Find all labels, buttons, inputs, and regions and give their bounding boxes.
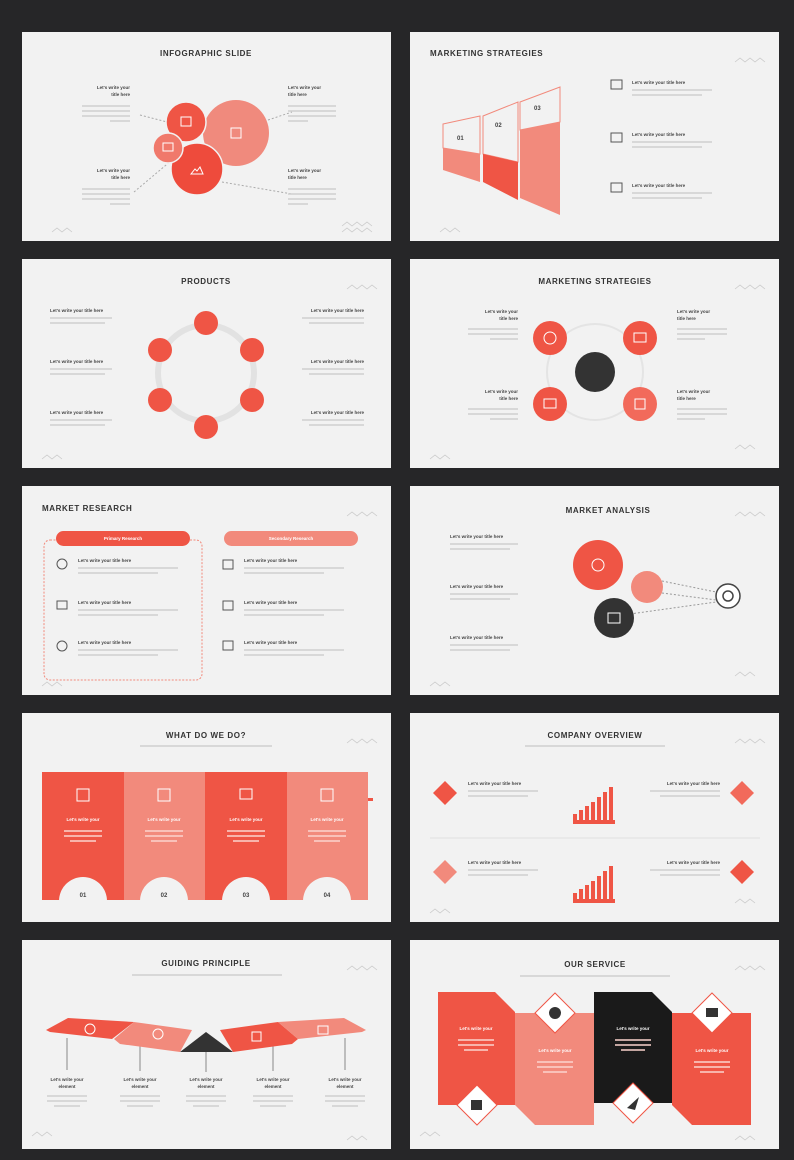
four step columns: 01: [80, 893, 87, 899]
secondary research panel: [223, 531, 358, 655]
list items: Let's write your title here: [632, 183, 686, 188]
text blocks: [450, 534, 518, 650]
text blocks: Let's write your: [97, 85, 130, 90]
slide 5: market research: [22, 486, 391, 695]
secondary research panel: Let's write your title here: [244, 640, 298, 645]
service columns: Let's write your: [616, 1026, 650, 1031]
four step columns: 04: [324, 893, 331, 899]
text blocks: Let's write your: [485, 309, 518, 314]
five text blocks: Let's write your: [50, 1077, 84, 1082]
title: MARKETING STRATEGIES: [538, 277, 652, 286]
five text blocks: element: [58, 1084, 76, 1089]
five text blocks: element: [264, 1084, 282, 1089]
folded ribbon: [46, 1018, 366, 1072]
text blocks: [468, 781, 720, 875]
text blocks: Let's write your title here: [667, 860, 720, 865]
five text blocks: Let's write your: [123, 1077, 157, 1082]
five text blocks: Let's write your: [256, 1077, 290, 1082]
text blocks: Let's write your: [288, 85, 321, 90]
slide 3: products: [22, 259, 391, 468]
title: GUIDING PRINCIPLE: [161, 959, 251, 968]
bubble funnel: [573, 540, 740, 638]
text blocks: Let's write your: [485, 389, 518, 394]
perspective bars: 02: [495, 123, 502, 129]
title: WHAT DO WE DO?: [166, 731, 246, 740]
text columns: Let's write your title here: [311, 308, 364, 313]
text blocks: Let's write your title here: [468, 781, 522, 786]
list items: Let's write your title here: [632, 80, 686, 85]
title: MARKET RESEARCH: [42, 504, 132, 513]
hub diagram: [533, 321, 657, 421]
secondary research panel: Let's write your title here: [244, 558, 298, 563]
text blocks: title here: [499, 316, 518, 321]
four step columns: Let's write your: [66, 817, 100, 822]
five text blocks: Let's write your: [189, 1077, 223, 1082]
service columns: Let's write your: [538, 1048, 572, 1053]
text columns: [50, 308, 364, 425]
title: INFOGRAPHIC SLIDE: [160, 49, 252, 58]
five text blocks: element: [197, 1084, 215, 1089]
perspective bars: [443, 87, 560, 215]
title: MARKET ANALYSIS: [566, 506, 650, 515]
secondary research panel: Secondary Research: [269, 536, 314, 541]
slide 1: infographic slide: [22, 32, 391, 241]
four step columns: Let's write your: [147, 817, 181, 822]
text blocks: title here: [677, 316, 696, 321]
text blocks: title here: [288, 175, 307, 180]
slide 9: guiding principle: [22, 940, 391, 1149]
text blocks: Let's write your title here: [450, 635, 504, 640]
perspective bars: 03: [534, 106, 541, 112]
list items: Let's write your title here: [632, 132, 686, 137]
text blocks: title here: [111, 175, 130, 180]
text blocks: title here: [111, 92, 130, 97]
slide 7: what do we do: [22, 713, 391, 922]
slide 2: marketing strategies bars: [410, 32, 779, 241]
text blocks: Let's write your: [677, 309, 710, 314]
primary research panel: Let's write your title here: [78, 558, 132, 563]
slide 10: our service: [410, 940, 779, 1149]
primary research panel: Let's write your title here: [78, 600, 132, 605]
text columns: Let's write your title here: [50, 359, 104, 364]
text blocks: [82, 85, 336, 204]
text columns: Let's write your title here: [311, 359, 364, 364]
five text blocks: element: [336, 1084, 354, 1089]
five text blocks: [47, 1077, 365, 1106]
bubble cluster: [134, 100, 292, 195]
text blocks: title here: [288, 92, 307, 97]
perspective bars: 01: [457, 136, 464, 142]
text blocks: Let's write your: [677, 389, 710, 394]
primary research panel: Let's write your title here: [78, 640, 132, 645]
four step columns: Let's write your: [229, 817, 263, 822]
text blocks: Let's write your title here: [450, 534, 504, 539]
text columns: Let's write your title here: [50, 410, 104, 415]
five text blocks: Let's write your: [328, 1077, 362, 1082]
four step columns: 02: [161, 893, 168, 899]
diamonds and bar charts: [433, 781, 754, 901]
primary research panel: [44, 531, 202, 680]
slide 8: company overview: [410, 713, 779, 922]
text blocks: Let's write your title here: [468, 860, 522, 865]
service columns: Let's write your: [459, 1026, 493, 1031]
five text blocks: element: [131, 1084, 149, 1089]
slide 6: market analysis: [410, 486, 779, 695]
text blocks: title here: [499, 396, 518, 401]
secondary research panel: Let's write your title here: [244, 600, 298, 605]
four step columns: [22, 772, 391, 925]
title: MARKETING STRATEGIES: [430, 49, 543, 58]
text columns: Let's write your title here: [311, 410, 364, 415]
text columns: Let's write your title here: [50, 308, 104, 313]
list items: [611, 80, 712, 198]
text blocks: Let's write your title here: [667, 781, 720, 786]
service columns: Let's write your: [695, 1048, 729, 1053]
title: PRODUCTS: [181, 277, 231, 286]
text blocks: [468, 309, 727, 419]
title: OUR SERVICE: [564, 960, 626, 969]
text blocks: Let's write your: [97, 168, 130, 173]
four step columns: 03: [243, 893, 250, 899]
primary research panel: Primary Research: [104, 536, 142, 541]
slide 4: marketing strategies hub: [410, 259, 779, 468]
four step columns: Let's write your: [310, 817, 344, 822]
text blocks: Let's write your: [288, 168, 321, 173]
text blocks: title here: [677, 396, 696, 401]
cycle diagram: [148, 311, 264, 439]
service columns: [438, 992, 751, 1125]
title: COMPANY OVERVIEW: [548, 731, 642, 740]
text blocks: Let's write your title here: [450, 584, 504, 589]
